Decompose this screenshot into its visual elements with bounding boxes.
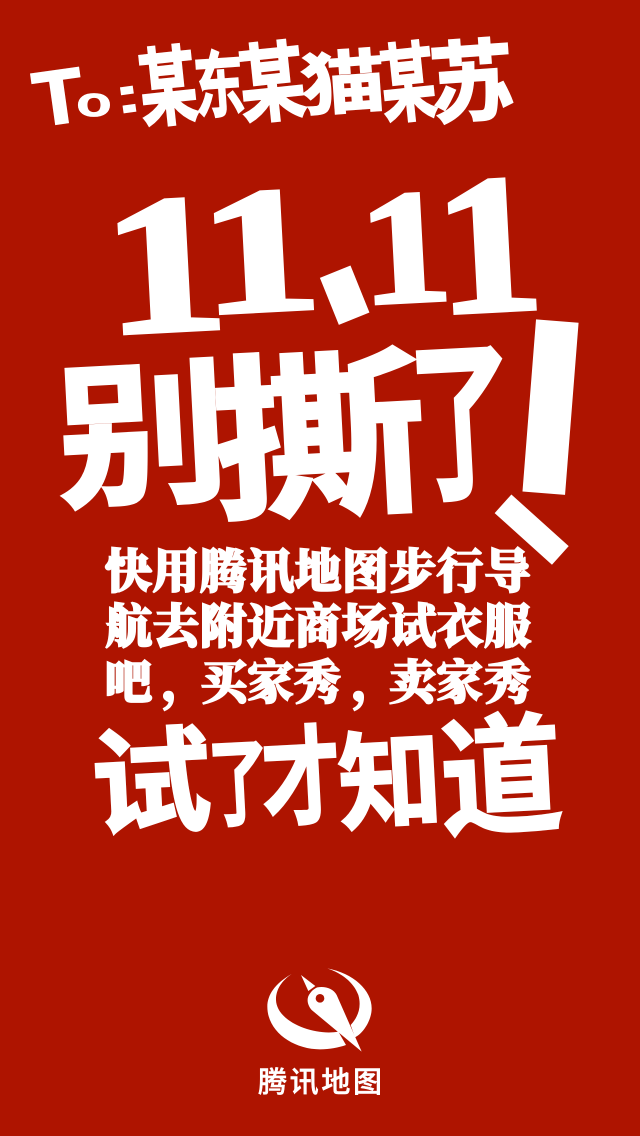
slogan: 试了才知道: 试 — [88, 717, 214, 851]
logo: Tencent Maps compass — [267, 968, 372, 1052]
headline: 别撕了!: 了 — [406, 326, 518, 523]
headline: 11、11: l — [304, 251, 387, 343]
slogan: 试了才知道: 知 — [335, 722, 445, 845]
headline: 11、11: 1 — [429, 132, 548, 357]
headline: 别撕了!: l — [474, 474, 592, 587]
heading: To 某东某猫某苏: o — [76, 78, 112, 125]
headline: 别撕了! — [52, 277, 601, 587]
heading: To 某东某猫某苏: 某 — [234, 34, 310, 136]
heading: To 某东某猫某苏: 某 — [376, 35, 441, 135]
heading: To 某东某猫某苏: T — [28, 51, 88, 143]
slogan: 试了才知道: 了 — [206, 730, 272, 839]
headline: 11、11 — [96, 132, 548, 377]
headline: 11、11: 1 — [96, 151, 233, 377]
heading: To 某东某猫某苏 — [28, 32, 517, 143]
heading: To 某东某猫某苏: 苏 — [427, 32, 517, 136]
text block: description: 吧，买家秀，卖家秀 — [105, 657, 531, 711]
headline: 11、11: 1 — [193, 148, 326, 354]
headline: 别撕了!: l — [500, 277, 601, 545]
heading: To 某东某猫某苏: 某 — [134, 39, 202, 139]
slogan: 试了才知道 — [88, 704, 566, 853]
headline: 别撕了!: 撕 — [207, 335, 432, 543]
text block: description: 航去附近商场试衣服 — [105, 602, 531, 654]
heading: To 某东某猫某苏: 猫 — [299, 44, 388, 125]
logo wordmark: 腾讯地图 — [258, 1066, 382, 1099]
text block: description: 快用腾讯地图步行导 — [105, 547, 531, 599]
headline: 别撕了!: 别 — [52, 345, 233, 529]
heading: To 某东某猫某苏: 东 — [191, 45, 247, 129]
heading: To 某东某猫某苏: : — [111, 66, 145, 125]
headline: 11、11: 1 — [354, 155, 456, 340]
slogan: 试了才知道: 才 — [258, 717, 344, 842]
text block: description — [105, 547, 531, 711]
slogan: 试了才知道: 道 — [436, 704, 566, 853]
